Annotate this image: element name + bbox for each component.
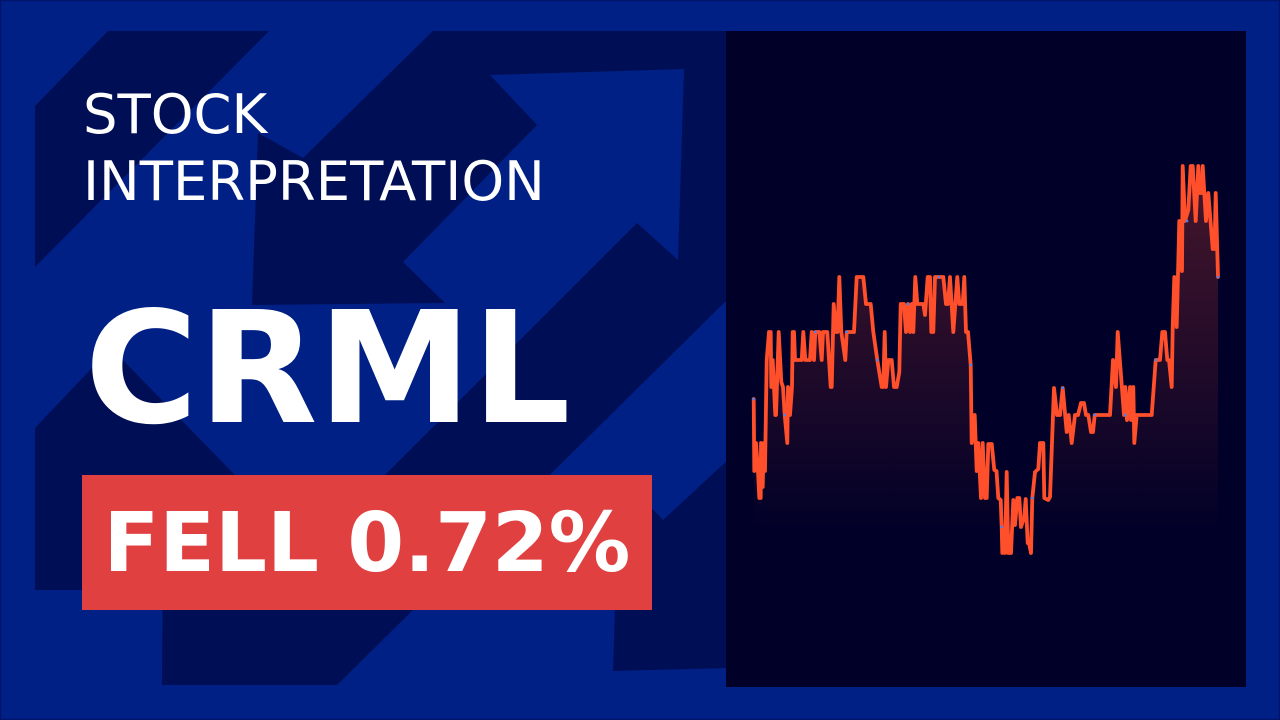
chart panel	[726, 31, 1246, 687]
ticker symbol: CRML	[84, 278, 571, 459]
heading: stock interpretation: INTERPRETATION	[83, 150, 545, 213]
badge: fell 0.72%	[82, 475, 652, 610]
badge: fell 0.72%: FELL 0.72%	[104, 496, 630, 591]
heading: stock interpretation: STOCK	[83, 83, 269, 146]
data point markers	[752, 220, 1219, 528]
price line	[754, 166, 1218, 553]
background arrows	[35, 31, 730, 685]
area fill	[754, 166, 1218, 553]
heading: stock interpretation	[83, 83, 545, 213]
